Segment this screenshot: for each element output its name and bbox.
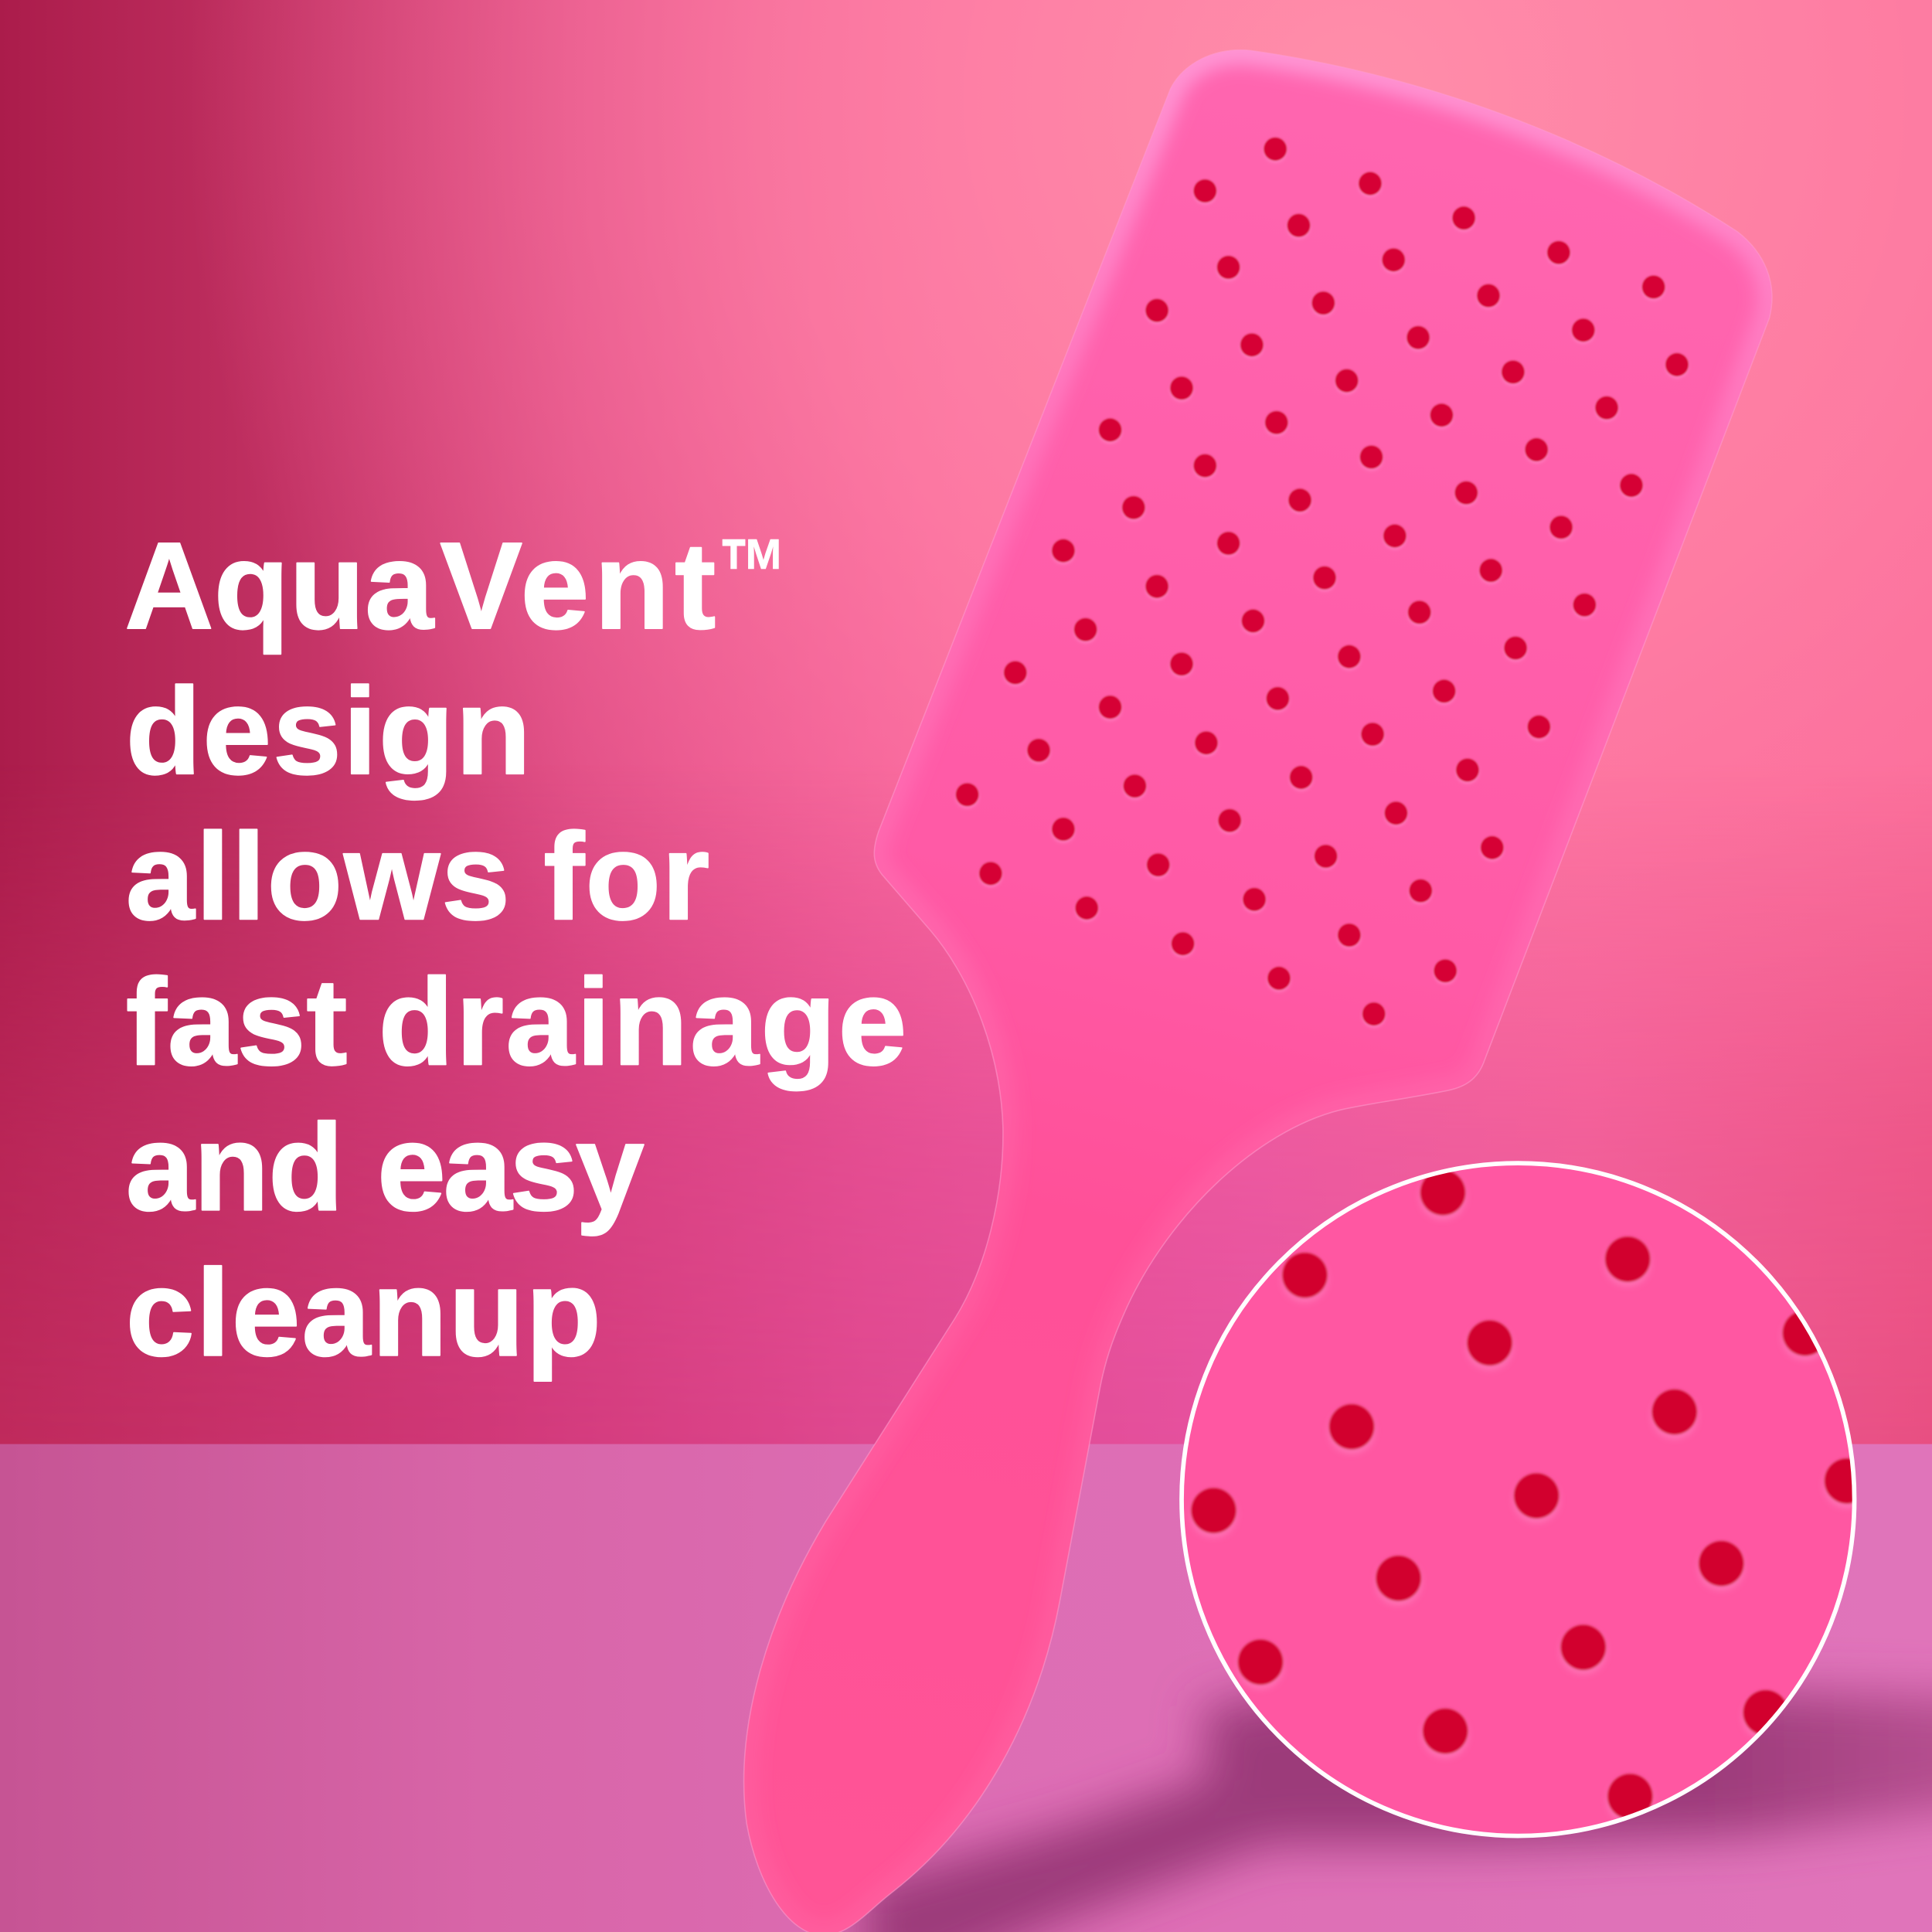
brush vent holes <box>955 138 1689 1026</box>
magnified holes <box>1191 1170 1869 1819</box>
hairbrush <box>744 50 1772 1932</box>
brush body <box>744 50 1772 1932</box>
line: fast drainage <box>126 953 906 1091</box>
magnified detail circle <box>1182 1163 1869 1836</box>
floor surface <box>0 1444 1932 1932</box>
line: design: design <box>126 662 531 800</box>
line: cleanup: cleanup <box>126 1243 601 1382</box>
line: AquaVent with trademark: Aqua <box>124 516 435 655</box>
line: allows for: allows <box>126 807 510 945</box>
line: AquaVent with trademark: ™ <box>719 519 787 624</box>
line: fast drainage: drainage <box>378 953 906 1091</box>
lens white ring <box>1182 1163 1855 1836</box>
line: AquaVent with trademark <box>124 516 787 655</box>
line: allows for <box>126 807 709 945</box>
line: and easy <box>126 1098 645 1236</box>
brush rim highlight <box>784 49 1771 1739</box>
line: and easy: easy <box>377 1098 645 1236</box>
background wall <box>0 0 1932 1447</box>
line: and easy: and <box>126 1098 344 1236</box>
headline text <box>124 516 906 1382</box>
line: allows for: for <box>543 807 709 945</box>
line: AquaVent with trademark: Vent <box>440 516 716 655</box>
lens fill <box>1182 1163 1855 1836</box>
brush cast shadow <box>862 1663 1932 1932</box>
line: fast drainage: fast <box>126 953 348 1091</box>
